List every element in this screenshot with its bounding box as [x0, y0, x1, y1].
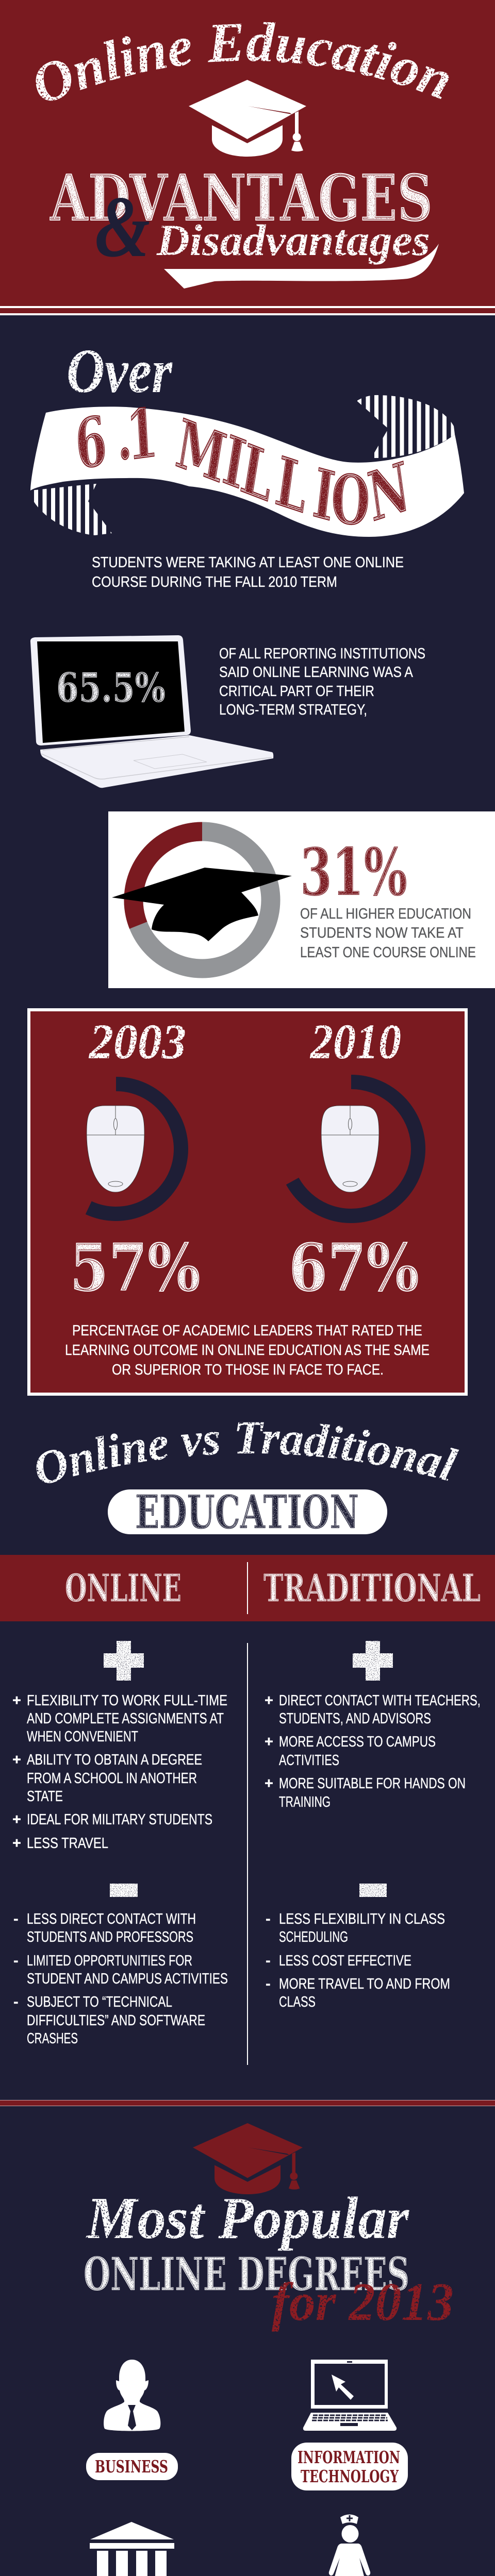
- list: traditional disadvantages: -: [266, 1953, 271, 1969]
- icon: mouse 2003: [87, 1106, 144, 1192]
- list: traditional disadvantages: [266, 1911, 450, 2010]
- heading: Over: Over: [67, 336, 173, 406]
- ribbon banner: [30, 406, 464, 537]
- section heading: online vs traditional education: [36, 1422, 459, 1539]
- heading: Disadvantages: Disadvantages: [156, 215, 430, 265]
- pill: INFORMATION TECHNOLOGY: INFORMATION: [298, 2447, 400, 2467]
- comparison header band: [0, 1555, 495, 1621]
- list: online advantages: +: [12, 1752, 21, 1768]
- icon: laptop with cursor: [303, 2360, 397, 2431]
- figure: 31%: 31%: [300, 834, 407, 910]
- list: traditional advantages: +: [265, 1734, 273, 1750]
- list: online disadvantages: SUBJECT TO “TECHNICAL: [27, 1994, 172, 2010]
- text: reporting institutions: CRITICAL PART OF THEIR: [219, 683, 374, 700]
- figure: 67%: 67%: [289, 1229, 419, 1306]
- list: online advantages: ABILITY TO OBTAIN A DEGREE: [27, 1752, 202, 1768]
- icon: black graduation cap: [112, 868, 292, 941]
- text: students taking online course: COURSE DURING THE FALL 2010 TERM: [92, 574, 337, 590]
- pill: BUSINESS: [86, 2453, 178, 2480]
- panel: online pros and cons: [12, 1641, 228, 2047]
- panel: academic leaders 2003 vs 2010: [29, 1010, 466, 1394]
- panel: 31% higher education students: [108, 811, 495, 988]
- icon: minus traditional: [359, 1884, 387, 1897]
- ampersand: &: [95, 178, 150, 275]
- year 2010: 2010: [309, 1014, 401, 1069]
- list: traditional advantages: STUDENTS, AND ADVISORS: [279, 1710, 431, 1727]
- list: online advantages: LESS TRAVEL: [27, 1835, 108, 1852]
- ring chart 67%: [292, 1082, 418, 1216]
- list: online advantages: IDEAL FOR MILITARY STUDENTS: [27, 1811, 212, 1828]
- icon: laptop: [30, 635, 273, 788]
- list: traditional disadvantages: LESS COST EFFECTIVE: [279, 1953, 411, 1969]
- icon: graduation cap: [189, 80, 306, 157]
- list: online advantages: +: [12, 1811, 21, 1828]
- list: traditional advantages: +: [265, 1775, 273, 1792]
- list: online disadvantages: -: [13, 1994, 19, 2010]
- ribbon tail left: [30, 484, 112, 535]
- icon: plus online: [104, 1641, 144, 1681]
- header panel: [0, 0, 495, 315]
- list: online disadvantages: LESS DIRECT CONTACT WITH: [27, 1911, 196, 1927]
- icon: maroon graduation cap: [193, 2123, 303, 2194]
- swoosh: [164, 244, 439, 289]
- list: online advantages: STATE: [27, 1788, 63, 1805]
- list: traditional advantages: MORE ACCESS TO CAMPUS: [279, 1734, 436, 1750]
- text: higher education: STUDENTS NOW TAKE AT: [300, 925, 464, 941]
- degree: criminal justice: [81, 2522, 183, 2576]
- list: traditional disadvantages: MORE TRAVEL TO AND FROM: [279, 1976, 450, 1992]
- list: traditional advantages: ACTIVITIES: [279, 1752, 339, 1769]
- pill: EDUCATION: EDUCATION: [135, 1485, 359, 1539]
- title: for 2013: for 2013: [272, 2272, 454, 2332]
- list: traditional advantages: [265, 1692, 481, 1810]
- list: traditional disadvantages: CLASS: [279, 1994, 316, 2010]
- list: traditional disadvantages: -: [266, 1911, 271, 1927]
- list: online disadvantages: STUDENT AND CAMPUS ACTIVITIES: [27, 1971, 228, 1987]
- text: percentage of academic leaders: LEARNING OUTCOME IN ONLINE EDUCATION AS THE SAME: [65, 1342, 430, 1359]
- pill: INFORMATION TECHNOLOGY: [291, 2443, 408, 2490]
- list: online advantages: +: [12, 1692, 21, 1709]
- panel: traditional pros and cons: [265, 1641, 481, 2010]
- list: online advantages: FLEXIBILITY TO WORK FULL-TIME: [27, 1692, 227, 1709]
- list: online disadvantages: -: [13, 1911, 19, 1927]
- text: reporting institutions: [219, 646, 425, 718]
- pill: INFORMATION TECHNOLOGY: TECHNOLOGY: [301, 2466, 399, 2486]
- icon: nurse: [329, 2514, 370, 2576]
- section heading: most popular online degrees: [84, 2123, 454, 2332]
- list: traditional disadvantages: -: [266, 1976, 271, 1992]
- column heading: ONLINE: ONLINE: [65, 1566, 182, 1611]
- icon: plus traditional: [353, 1641, 393, 1681]
- section: 65.5% laptop: [30, 635, 425, 788]
- text: higher education: [300, 906, 476, 961]
- list: online disadvantages: DIFFICULTIES” AND SOFTWARE: [27, 2012, 205, 2029]
- list: traditional disadvantages: SCHEDULING: [279, 1929, 348, 1945]
- list: online advantages: AND COMPLETE ASSIGNMENTS AT: [27, 1710, 224, 1727]
- donut chart 31%: [134, 832, 271, 969]
- text: reporting institutions: SAID ONLINE LEARNING WAS A: [219, 664, 414, 681]
- ring chart 57%: [89, 1084, 181, 1214]
- title: Most Popular: Most Popular: [86, 2185, 409, 2251]
- figure: 57%: 57%: [70, 1229, 201, 1306]
- list: online advantages: [12, 1692, 227, 1852]
- text: reporting institutions: LONG-TERM STRATEGY,: [219, 702, 367, 718]
- list: traditional advantages: TRAINING: [279, 1794, 331, 1810]
- figure: 65.5%: 65.5%: [56, 665, 166, 711]
- year 2003: 2003: [88, 1014, 186, 1069]
- text: reporting institutions: OF ALL REPORTING INSTITUTIONS: [219, 646, 425, 662]
- list: online disadvantages: [13, 1911, 228, 2047]
- ribbon tail right: [357, 395, 455, 458]
- text: students taking online course: STUDENTS WERE TAKING AT LEAST ONE ONLINE: [92, 554, 404, 571]
- list: online disadvantages: CRASHES: [27, 2030, 78, 2047]
- icon: mouse 2010: [321, 1106, 379, 1192]
- text: students taking online course: [92, 554, 404, 590]
- list: online advantages: +: [12, 1835, 21, 1852]
- list: online disadvantages: -: [13, 1953, 19, 1969]
- text: percentage of academic leaders: OR SUPERIOR TO THOSE IN FACE TO FACE.: [112, 1362, 384, 1378]
- title: Online Education: Online Education: [36, 22, 449, 101]
- degree: information technology: [291, 2360, 408, 2490]
- degree: business: [86, 2360, 178, 2480]
- list: online advantages: WHEN CONVENIENT: [27, 1728, 138, 1745]
- text: percentage of academic leaders: PERCENTAGE OF ACADEMIC LEADERS THAT RATED THE: [72, 1323, 422, 1339]
- degree: nursing health care: [291, 2514, 408, 2576]
- text: percentage of academic leaders: [65, 1323, 430, 1378]
- pill: BUSINESS: BUSINESS: [95, 2456, 168, 2477]
- icon: businessman: [104, 2360, 160, 2431]
- title: Online vs Traditional: Online vs Traditional: [36, 1422, 459, 1483]
- list: online disadvantages: STUDENTS AND PROFESSORS: [27, 1929, 193, 1945]
- list: online advantages: FROM A SCHOOL IN ANOTHER: [27, 1770, 197, 1787]
- list: online disadvantages: LIMITED OPPORTUNITIES FOR: [27, 1953, 192, 1969]
- list: traditional disadvantages: LESS FLEXIBILITY IN CLASS: [279, 1911, 445, 1927]
- icon: minus online: [110, 1884, 138, 1897]
- section: 6.1 million students: [30, 336, 464, 590]
- figure: 6.1 MILLION: 6.1MILLION: [72, 393, 414, 543]
- list: traditional advantages: +: [265, 1692, 273, 1709]
- icon: courthouse: [85, 2522, 179, 2576]
